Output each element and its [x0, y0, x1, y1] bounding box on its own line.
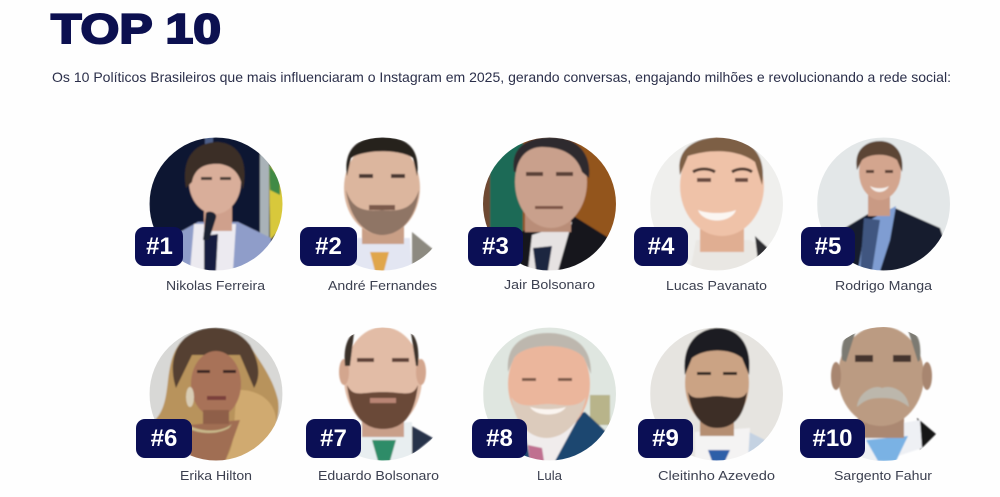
name: Rodrigo Manga — [835, 279, 932, 293]
name: Cleitinho Azevedo — [658, 469, 775, 483]
badge #5: #5 — [815, 233, 841, 260]
card: #10 Sargento Fahur — [800, 326, 936, 483]
badge #9 — [638, 419, 693, 458]
name: Nikolas Ferreira — [166, 279, 265, 293]
card: #6 Erika Hilton — [136, 327, 283, 483]
badge #7 — [306, 419, 361, 458]
badge #7: #7 — [320, 425, 347, 452]
badge #2: #2 — [315, 233, 342, 260]
badge #1: #1 — [146, 233, 173, 260]
card: #9 Cleitinho Azevedo — [638, 327, 784, 483]
portrait: Nikolas Ferreira — [149, 137, 284, 271]
badge #9: #9 — [652, 425, 679, 452]
card: #8 Lula — [472, 327, 617, 483]
name: Lucas Pavanato — [666, 279, 767, 293]
card: #7 Eduardo Bolsonaro — [306, 327, 439, 483]
portrait: Eduardo Bolsonaro — [339, 327, 433, 461]
badge #3 — [468, 227, 523, 266]
portrait: Erika Hilton — [149, 327, 283, 462]
portrait: Jair Bolsonaro — [480, 136, 617, 271]
name: Sargento Fahur — [834, 469, 932, 483]
portrait: Lula — [483, 327, 617, 461]
badge #10 — [800, 419, 865, 458]
portrait: Lucas Pavanato — [650, 136, 784, 271]
badge #6: #6 — [151, 425, 177, 452]
name: Erika Hilton — [180, 469, 252, 483]
portrait: Sargento Fahur — [831, 326, 936, 462]
badge #8 — [472, 419, 527, 458]
portrait: André Fernandes — [344, 137, 434, 271]
name: Lula — [537, 469, 562, 483]
badge #4: #4 — [648, 233, 675, 260]
card: #4 Lucas Pavanato — [634, 136, 784, 293]
card: #3 Jair Bolsonaro — [468, 136, 617, 292]
badge #6 — [136, 419, 192, 458]
title: TOP 10 — [51, 5, 221, 52]
name: Jair Bolsonaro — [504, 278, 595, 292]
badge #1 — [135, 227, 183, 266]
badge #4 — [634, 227, 688, 266]
badge #5 — [801, 227, 855, 266]
badge #8: #8 — [486, 425, 513, 452]
badge #10: #10 — [812, 425, 853, 452]
badge #3: #3 — [482, 233, 509, 260]
name: André Fernandes — [328, 279, 437, 293]
card: #5 Rodrigo Manga — [801, 137, 951, 293]
card: #1 Nikolas Ferreira — [135, 137, 284, 293]
name: Eduardo Bolsonaro — [318, 469, 439, 483]
badge #2 — [300, 227, 357, 266]
portrait: Rodrigo Manga — [817, 137, 951, 271]
subtitle text: Os 10 Políticos Brasileiros que mais influenciaram o Instagram em 2025, gerando conversas, engajando milhões e revolucionando a rede social: — [52, 69, 951, 85]
card: #2 André Fernandes — [300, 137, 437, 293]
portrait: Cleitinho Azevedo — [650, 327, 784, 461]
